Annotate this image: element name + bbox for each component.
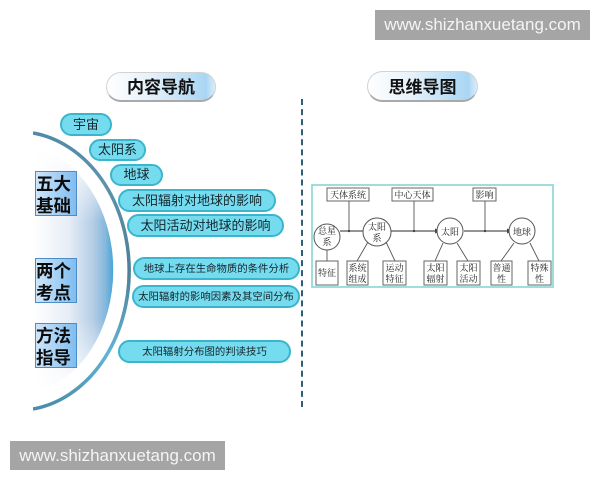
watermark: top right: www.shizhanxuetang.com (384, 15, 581, 34)
pill: solar activity: 太阳活动对地球的影响 (140, 218, 270, 233)
box: solar activity: 活动 (459, 273, 478, 284)
heading: content navigation: 内容导航 (127, 78, 195, 97)
tag: five foundations (35, 171, 77, 216)
box: features (316, 261, 338, 285)
pill: radiation factors: 太阳辐射的影响因素及其空间分布 (138, 292, 294, 303)
heading: mind map: 思维导图 (388, 78, 456, 97)
concept map diagram (311, 184, 554, 288)
circle: total galaxy: 系 (322, 236, 332, 247)
box: solar radiation: 辐射 (426, 273, 445, 284)
box: particularity: 特殊 (530, 262, 549, 273)
watermark: top right (375, 10, 590, 40)
box: generality: 普通 (492, 262, 511, 273)
pill: solar system (89, 139, 146, 161)
circle: earth (509, 218, 535, 244)
pill: radiation factors (132, 285, 300, 308)
pill: solar system: 太阳系 (98, 142, 137, 157)
box: central body: 中心天体 (394, 189, 431, 200)
watermark: bottom left (10, 441, 225, 470)
box: influence: 影响 (475, 189, 494, 200)
watermark: bottom left: www.shizhanxuetang.com (19, 446, 216, 465)
box: motion features: 特征 (385, 273, 404, 284)
box: particularity (528, 261, 551, 285)
box: motion features: 运动 (385, 262, 404, 273)
pill: solar activity (127, 214, 284, 237)
box: solar activity: 太阳 (459, 262, 478, 273)
box: features: 特征 (318, 267, 336, 278)
pill: conditions for life: 地球上存在生命物质的条件分析 (144, 264, 289, 275)
tag: two key points: 考点 (36, 283, 71, 303)
circle: total galaxy (314, 224, 340, 250)
heading: mind map (367, 71, 478, 102)
box: generality (491, 261, 512, 285)
tag: method guidance (35, 323, 77, 368)
pill: universe (60, 113, 112, 136)
pill: solar radiation (118, 189, 276, 212)
tag: two key points (35, 258, 77, 303)
box: influence (473, 188, 496, 201)
box: celestial system (327, 188, 369, 201)
box: solar activity (457, 261, 480, 285)
circle: solar system (363, 218, 391, 246)
box: particularity: 性 (535, 273, 544, 284)
pill: solar radiation: 太阳辐射对地球的影响 (132, 193, 262, 208)
circle: sun: 太阳 (441, 226, 459, 237)
pill: radiation map skills: 太阳辐射分布图的判读技巧 (142, 347, 267, 358)
circle: earth: 地球 (513, 226, 531, 237)
pill: radiation map skills (118, 340, 291, 363)
box: system composition: 组成 (348, 273, 367, 284)
circle: solar system: 系 (372, 232, 382, 243)
pill: earth (110, 164, 163, 186)
tag: method guidance: 方法 (36, 326, 71, 346)
pill: conditions for life (133, 257, 300, 280)
box: solar radiation (424, 261, 447, 285)
circle: total galaxy: 总星 (318, 225, 336, 236)
box: celestial system: 天体系统 (330, 189, 366, 200)
tag: five foundations: 五大 (36, 174, 71, 194)
tag: two key points: 两个 (36, 261, 71, 281)
heading: content navigation (106, 72, 216, 102)
graphic: semicircle with arc (33, 131, 131, 411)
box: system composition: 系统 (348, 262, 367, 273)
box: system composition (347, 261, 368, 285)
box: solar radiation: 太阳 (426, 262, 445, 273)
tag: method guidance: 指导 (36, 348, 71, 368)
pill: earth: 地球 (123, 167, 150, 182)
box: motion features (383, 261, 406, 285)
circle: solar system: 太阳 (368, 221, 386, 232)
box: generality: 性 (497, 273, 506, 284)
pill: universe: 宇宙 (73, 117, 99, 132)
tag: five foundations: 基础 (36, 196, 71, 216)
circle: sun (437, 218, 463, 244)
box: central body (392, 188, 433, 201)
